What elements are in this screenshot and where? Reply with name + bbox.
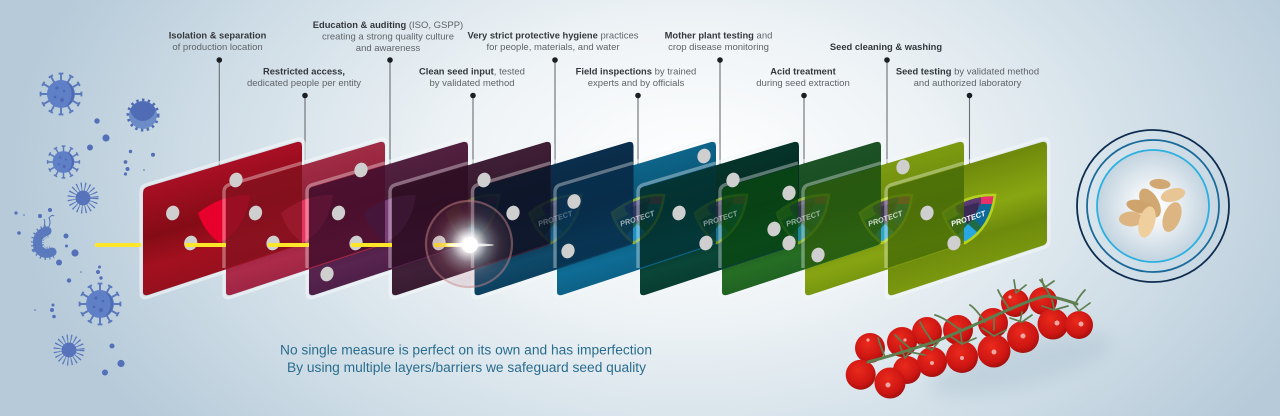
panel 9: seed cleaning xyxy=(805,142,964,295)
connector lines and dots xyxy=(216,57,972,166)
panel edge highlights xyxy=(224,163,964,268)
label: seed cleaning: Seed cleaning & washing xyxy=(830,42,942,52)
shield wordmarks: PROTECT xyxy=(785,208,823,228)
label: seed testing: and authorized laboratory xyxy=(914,78,1022,89)
shield 1 xyxy=(198,195,250,243)
shield 8 xyxy=(774,190,834,246)
panel 3: education xyxy=(309,142,468,295)
panel overlap regions xyxy=(226,166,964,268)
icon: virus 4 xyxy=(72,186,94,210)
shield 10 xyxy=(940,190,1000,246)
panel 1: isolation xyxy=(143,142,302,295)
highlights xyxy=(866,295,1084,388)
label: seed testing: Seed testing by validated method xyxy=(896,66,1039,78)
label: mother plant: Mother plant testing and xyxy=(665,30,772,42)
label: isolation: Isolation & separation xyxy=(169,30,267,40)
label: restricted access: Restricted access, xyxy=(263,66,345,76)
panel 4: clean seed xyxy=(392,142,551,295)
label: education: creating a strong quality culture xyxy=(322,31,454,42)
shield 6 xyxy=(609,190,669,246)
viruses and particles xyxy=(14,74,158,375)
shield wordmarks: PROTECT xyxy=(619,208,657,228)
label: hygiene: Very strict protective hygiene practices xyxy=(467,30,639,42)
icon: virus 6 xyxy=(58,338,80,362)
tomato shadow xyxy=(922,321,1118,409)
panel 2: restricted access xyxy=(226,142,385,295)
panel halos xyxy=(141,139,1049,298)
icon: virus 3 xyxy=(48,146,79,178)
icon: virus 5 xyxy=(80,284,120,324)
light flare stopping the beam xyxy=(425,200,513,288)
tomato truss xyxy=(846,279,1118,409)
panel 6: field inspections xyxy=(557,142,716,295)
label: isolation: of production location xyxy=(172,42,263,53)
closing message: No single measure is perfect on its own and has imperfection xyxy=(280,342,652,358)
label: mother plant: crop disease monitoring xyxy=(668,42,769,53)
label: acid treatment: Acid treatment xyxy=(770,66,836,76)
shield 3 xyxy=(364,195,416,243)
shield 7 xyxy=(692,190,752,246)
label: restricted access: dedicated people per entity xyxy=(247,78,361,89)
label: education: and awareness xyxy=(356,43,420,54)
label: field inspections: Field inspections by trained xyxy=(576,66,696,78)
label: hygiene: for people, materials, and water xyxy=(486,42,620,53)
icon: virus 1 xyxy=(41,74,81,114)
threat beam xyxy=(95,243,470,247)
shield wordmarks: PROTECT xyxy=(702,208,740,228)
stem and sepals xyxy=(868,279,1090,362)
shield 4 xyxy=(444,190,504,246)
shield wordmarks: PROTECT xyxy=(867,208,905,228)
barrier panels xyxy=(143,142,1047,295)
label: acid treatment: during seed extraction xyxy=(756,78,850,89)
shield wordmarks: PROTECT xyxy=(950,208,988,228)
protect shields xyxy=(198,190,1000,246)
panel holes xyxy=(164,147,963,283)
panel 10: seed testing xyxy=(888,142,1047,295)
panel 5: hygiene xyxy=(474,142,634,295)
closing message: By using multiple layers/barriers we safeguard seed quality xyxy=(287,360,646,375)
label: clean seed: by validated method xyxy=(429,78,515,89)
shield 2 xyxy=(281,195,333,243)
seed dish with protective rings xyxy=(1077,130,1229,282)
shield 5 xyxy=(526,190,586,246)
icon: virus 2 xyxy=(128,100,158,130)
shield wordmarks: PROTECT xyxy=(537,208,575,228)
icon: bacterium xyxy=(37,215,54,253)
label: field inspections: experts and by officials xyxy=(588,78,684,89)
particles xyxy=(14,118,155,376)
panel 8: acid treatment xyxy=(722,142,881,295)
icon: seeds xyxy=(1119,178,1187,240)
label: education: Education & auditing (ISO, GSPP) xyxy=(313,20,463,31)
shield wordmarks xyxy=(537,208,988,228)
shield 9 xyxy=(857,190,917,246)
closing message xyxy=(280,342,652,375)
tomatoes xyxy=(846,287,1093,398)
panel 7: mother plant xyxy=(640,142,799,295)
label: clean seed: Clean seed input, tested xyxy=(419,66,525,78)
